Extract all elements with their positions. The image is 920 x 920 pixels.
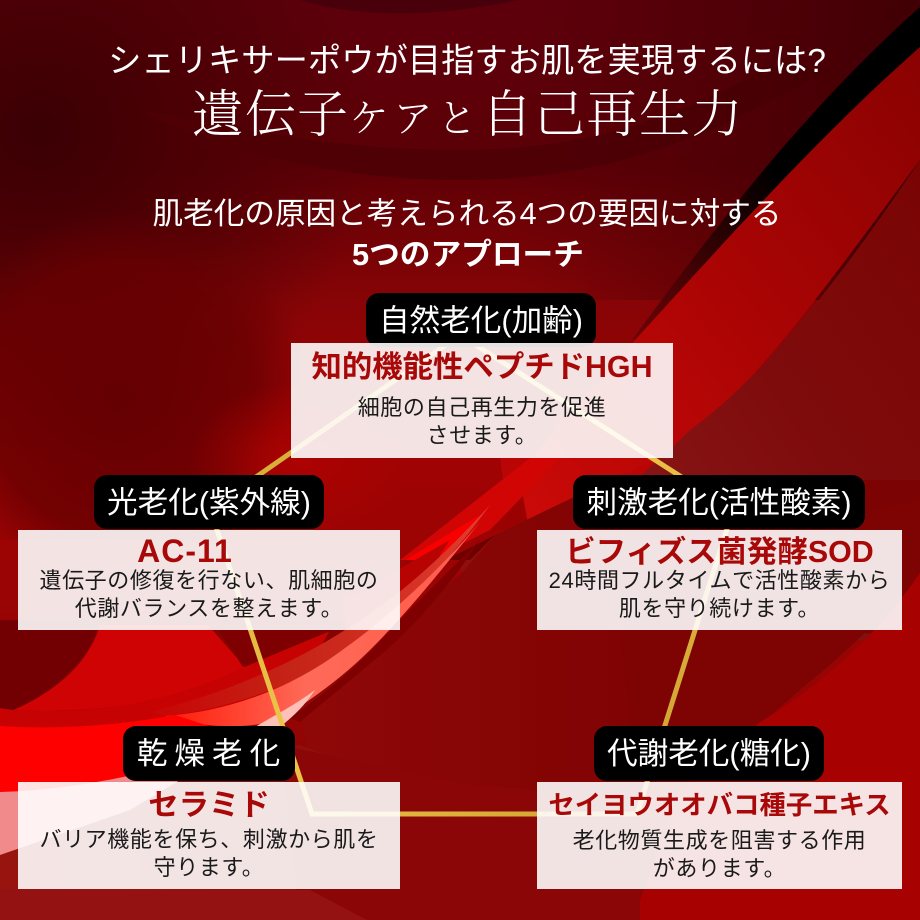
panel body: があります。 [653, 856, 786, 880]
panel body [358, 395, 606, 448]
bright red lower right [632, 573, 920, 920]
panel: plantago seed extract [537, 782, 902, 889]
centre dark red [300, 475, 920, 920]
centre glow [190, 380, 410, 540]
panel body [573, 828, 866, 880]
black stripe upper right [632, 7, 920, 340]
tag: natural aging: 自然老化(加齢) [379, 304, 583, 338]
panel body: 細胞の自己再生力を促進 [358, 395, 606, 420]
panel body [549, 568, 890, 620]
tag: oxidative aging: 刺激老化(活性酸素) [586, 486, 852, 520]
panel body: 肌を守り続けます。 [619, 596, 820, 620]
panel body [39, 568, 378, 620]
panel body: させます。 [427, 422, 537, 448]
tag: glycation aging [594, 726, 824, 781]
panel heading: セラミド [148, 788, 270, 822]
swoosh muted band [150, 505, 490, 716]
dark region on the right [580, 160, 920, 640]
tag: glycation aging: 代謝老化(糖化) [607, 737, 811, 771]
panel body: 24時間フルタイムで活性酸素から [549, 568, 890, 593]
dark area left [0, 210, 310, 540]
panel body: 老化物質生成を阻害する作用 [573, 828, 866, 853]
left-middle red [0, 620, 400, 730]
panel heading: AC-11 [137, 533, 233, 569]
panel body: 代謝バランスを整えます。 [75, 596, 343, 620]
panel body: 遺伝子の修復を行ない、肌細胞の [39, 568, 378, 593]
tag: dry aging: 乾燥老化 [137, 737, 287, 771]
panel: AC-11 [18, 530, 400, 630]
panel: bifidus SOD [537, 530, 902, 630]
tag: photo aging [94, 475, 324, 529]
panel body [39, 827, 378, 880]
tag: photo aging: 光老化(紫外線) [107, 486, 311, 520]
panel body: 守ります。 [154, 854, 264, 880]
tag: dry aging [123, 726, 295, 781]
main red diagonal band [520, 47, 920, 535]
panel body: バリア機能を保ち、刺激から肌を [39, 827, 378, 852]
bright red band at left [0, 715, 215, 800]
tag: oxidative aging [573, 475, 865, 529]
panel heading: セイヨウオオバコ種子エキス [548, 790, 891, 820]
panel: peptide HGH [291, 343, 673, 458]
dark edge under swoosh [290, 540, 480, 722]
panel: ceramide [18, 782, 400, 889]
panel heading: ビフィズス菌発酵SOD [565, 535, 874, 569]
streaks at centre [400, 458, 560, 560]
title: upper line: シェリキサーポウが目指すお肌を実現するには? [108, 43, 826, 80]
title: main heading: 遺伝子ケアと自己再生力 [192, 88, 744, 144]
subtitle bold line: 5つのアプローチ [352, 237, 584, 272]
panel heading: 知的機能性ペプチドHGH [311, 350, 653, 384]
under-panel red [500, 456, 700, 540]
swoosh salmon band [165, 522, 480, 726]
top arcs [140, 60, 830, 180]
tag: natural aging [366, 293, 596, 347]
pentagon frame: gold line [210, 335, 733, 814]
dark and pink strip at lower left [0, 745, 460, 920]
subtitle line: 肌老化の原因と考えられる4つの要因に対する [153, 197, 781, 231]
